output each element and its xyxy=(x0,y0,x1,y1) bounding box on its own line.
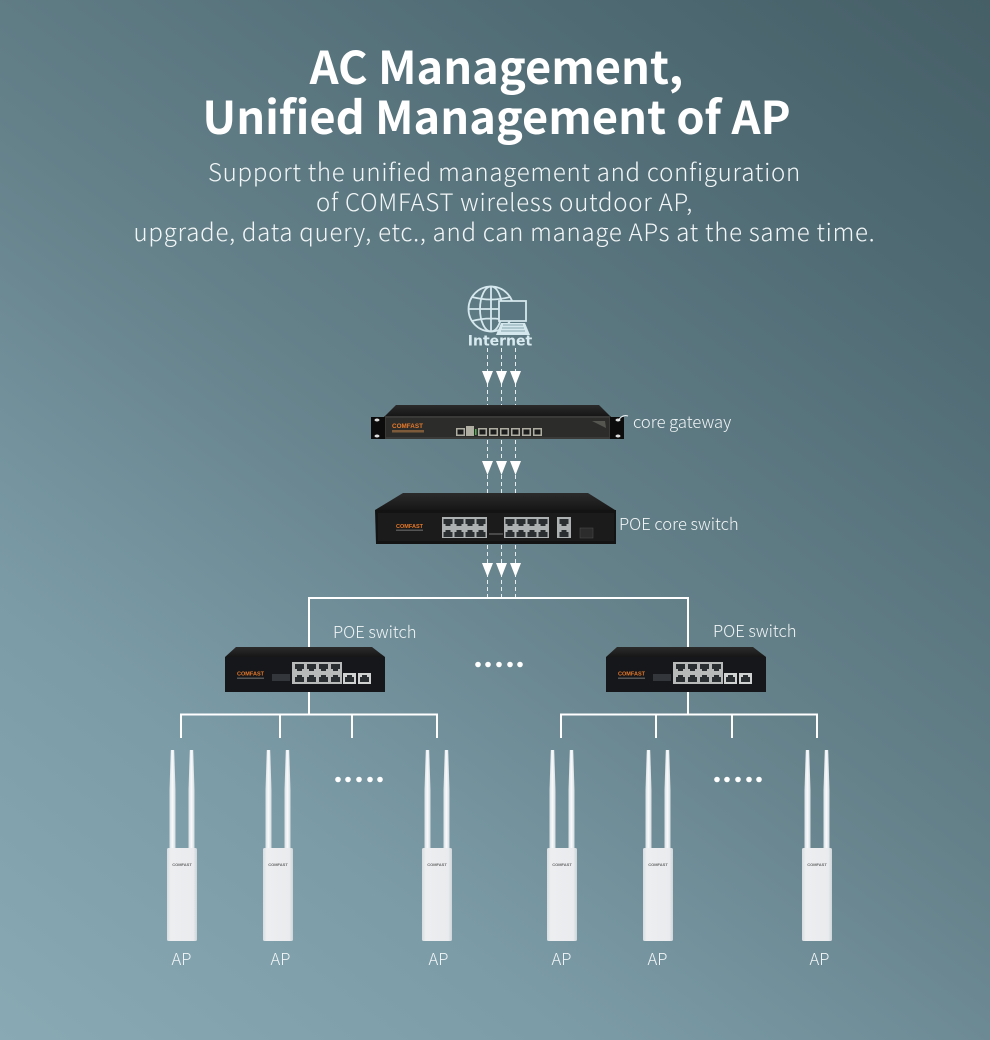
connector lines xyxy=(181,598,817,738)
device: core gateway xyxy=(371,405,624,439)
ellipsis dots left APs xyxy=(335,777,383,782)
AP labels: AP xyxy=(172,946,191,970)
access point 5: COMFAST xyxy=(648,862,668,867)
access point 2: COMFAST xyxy=(268,862,288,867)
access point 3: COMFAST xyxy=(427,862,447,867)
access point 6 xyxy=(802,750,832,941)
device: POE switch left xyxy=(225,647,385,692)
access point 1: COMFAST xyxy=(172,862,192,867)
AP labels: AP xyxy=(648,946,667,970)
subtitle text block: of COMFAST wireless outdoor AP, xyxy=(316,183,693,218)
label: POE switch right: POE switch xyxy=(713,618,797,642)
subtitle text block: upgrade, data query, etc., and can manage APs at the same time. xyxy=(134,213,875,248)
AP labels: AP xyxy=(810,946,829,970)
access point 5 xyxy=(643,750,673,941)
icon: internet globe and laptop: Internet xyxy=(468,334,533,350)
subtitle text block: Support the unified management and configuration xyxy=(208,153,801,188)
ellipsis dots between switches xyxy=(475,662,523,667)
ellipsis dots right APs xyxy=(714,777,762,782)
access point 3 xyxy=(422,750,452,941)
device: POE switch right xyxy=(606,647,766,692)
device: POE switch right: COMFAST xyxy=(618,672,646,678)
title: AC Management, xyxy=(310,33,683,98)
title: Unified Management of AP xyxy=(202,83,791,148)
access point 1 xyxy=(167,750,197,941)
label: core gateway: core gateway xyxy=(633,409,731,433)
label: POE core switch: POE core switch xyxy=(619,511,739,535)
arrows into POE core switch xyxy=(482,461,521,475)
access point 4 xyxy=(547,750,577,941)
access point 4: COMFAST xyxy=(552,862,572,867)
AP labels: AP xyxy=(552,946,571,970)
device: POE core switch xyxy=(375,493,616,544)
access point 2 xyxy=(263,750,293,941)
label: POE switch left: POE switch xyxy=(333,619,417,643)
title xyxy=(202,33,791,148)
icon: internet globe and laptop xyxy=(468,286,533,350)
subtitle text block xyxy=(134,153,875,248)
AP labels: AP xyxy=(429,946,448,970)
AP labels xyxy=(172,946,829,970)
dashed data links xyxy=(488,348,516,598)
device: POE switch left: COMFAST xyxy=(237,672,265,678)
device: core gateway: COMFAST xyxy=(392,424,423,430)
device: POE core switch: COMFAST xyxy=(396,524,424,530)
arrows into core gateway xyxy=(482,371,521,385)
arrows into POE switches xyxy=(482,563,521,577)
access point 6: COMFAST xyxy=(807,862,827,867)
AP labels: AP xyxy=(271,946,290,970)
